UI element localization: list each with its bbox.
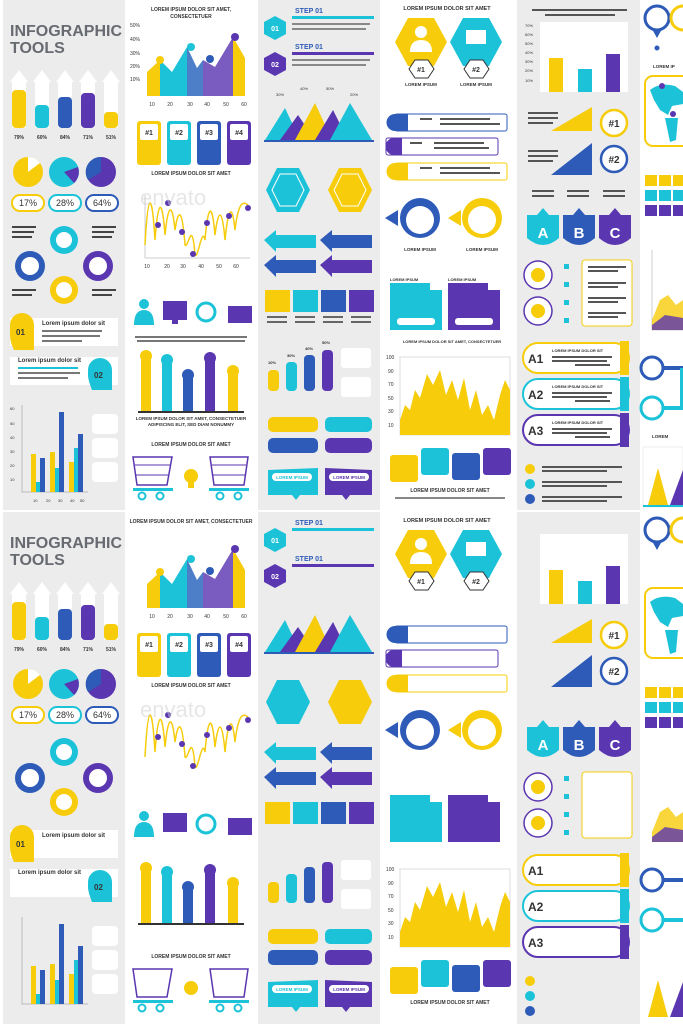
bar chart: 10% [525, 78, 533, 83]
shields A B C: C [610, 225, 621, 242]
yellow area chart: 50 [388, 908, 394, 914]
circular arrows [385, 198, 502, 252]
percentage bars: 50% [322, 340, 330, 345]
mountain chart: 20% [350, 92, 358, 97]
panel: column 2: CONSECTETUER [170, 14, 212, 20]
panel: column 5 [523, 9, 632, 504]
grouped bar chart [22, 917, 118, 1004]
yellow area chart: 90 [388, 369, 394, 375]
A1 A2 A3 pills [523, 341, 629, 447]
A1 A2 A3 pills: A2 [528, 388, 544, 402]
thermometer arrows [10, 582, 120, 653]
hexagon profiles [395, 18, 502, 87]
grouped bar chart: 30 [10, 449, 15, 454]
percentage bars: 30% [287, 353, 295, 358]
area chart: 50 [223, 614, 229, 620]
yellow area chart: 100 [386, 355, 395, 361]
line chart: 40 [198, 264, 204, 270]
callout 01: Lorem ipsum dolor sit [42, 321, 105, 327]
line chart: 20 [164, 264, 170, 270]
callout 02: Lorem ipsum dolor sit [18, 358, 81, 364]
pie charts [12, 157, 118, 211]
mountain chart [264, 615, 374, 654]
panel: column 1 repeat [10, 535, 122, 1004]
list boxes [386, 114, 507, 180]
steps [264, 520, 374, 588]
area chart: 30 [187, 614, 193, 620]
callouts 01/02: Lorem ipsum dolor sit [18, 870, 81, 876]
text and carts [133, 954, 249, 1012]
area chart: 40 [204, 614, 210, 620]
triangle chart [643, 434, 683, 507]
shields A B C: B [574, 225, 585, 242]
buttons: LOREM IPSUM [276, 475, 308, 480]
panel: column 4 repeat [385, 518, 511, 1006]
heading: LOREM IPSUM DOLOR SIT AMET [403, 6, 491, 12]
grid, chart, icons [641, 687, 683, 1017]
callouts 01/02: 01 [16, 840, 25, 849]
yellow area chart [386, 867, 510, 947]
panel: column 2 [130, 7, 252, 500]
bottom icons: LOREM IPSUM DOLOR SIT AMET [410, 1000, 490, 1006]
bottom icons [390, 960, 511, 1006]
area chart [147, 545, 247, 620]
triangle #2 [528, 143, 627, 175]
teardrop diagram [15, 738, 113, 816]
shields: A [538, 737, 549, 754]
bar chart [540, 534, 628, 604]
A pills [523, 853, 629, 959]
callouts 01/02: Lorem ipsum dolor sit [42, 833, 105, 839]
grouped bar chart: 40 [70, 498, 75, 503]
mountain chart: 30% [276, 92, 284, 97]
map: LOREM IP [653, 64, 675, 69]
text blocks: ADIPISCING ELIT, SED DIAM NONUMMY [148, 422, 234, 427]
yellow area chart: 70 [388, 894, 394, 900]
A pills: A3 [528, 936, 544, 950]
step 01: STEP 01 [295, 8, 323, 15]
bar chart: 60% [525, 32, 533, 37]
area chart: 50% [130, 23, 141, 29]
A1 A2 A3 pills: A1 [528, 352, 544, 366]
area chart: 10 [149, 614, 155, 620]
chart title: LOREM IPSUM DOLOR SIT AMET, [151, 7, 232, 13]
area chart: 20 [167, 102, 173, 108]
percentage bars: 10% [268, 360, 276, 365]
panel: column 1: TOOLS [10, 40, 65, 57]
line chart: 30 [180, 264, 186, 270]
icon squares [265, 290, 374, 323]
list boxes [386, 626, 507, 692]
A1 A2 A3 pills: LOREM IPSUM DOLOR SIT [552, 384, 604, 389]
yellow area chart: 30 [388, 921, 394, 927]
area chart: 30 [187, 102, 193, 108]
shields A B C: A [538, 225, 549, 242]
yellow area chart: 100 [386, 867, 395, 873]
text blocks: LOREM IPSUM DOLOR SIT AMET, CONSECTETUER [136, 416, 247, 421]
steps #1-#4 [137, 633, 251, 677]
pie charts: 28% [56, 198, 74, 208]
triangles: #2 [608, 667, 620, 678]
grouped bar chart: 20 [10, 463, 15, 468]
circular arrows [385, 710, 502, 750]
mountain chart: 50% [326, 86, 334, 91]
thermometer arrows [10, 70, 120, 141]
thermometer arrows: 51% [106, 135, 117, 141]
buttons: LOREM IPSUM [333, 987, 365, 992]
icon squares [265, 802, 374, 824]
shields A B C [527, 190, 631, 245]
thermometer arrows: 79% [14, 135, 25, 141]
percentage bars [268, 340, 371, 397]
area chart: 50 [223, 102, 229, 108]
arrows [264, 230, 372, 277]
callout 01 [10, 313, 118, 350]
grouped bar chart: 10 [33, 498, 38, 503]
area chart: 10% [130, 77, 141, 83]
yellow area chart: LOREM IPSUM DOLOR SIT AMET, CONSECTETUER [403, 339, 501, 344]
steps #1-#4: #3 [205, 642, 213, 649]
step 02 [264, 44, 374, 76]
steps: 01 [271, 538, 279, 545]
pie charts: 17% [19, 198, 37, 208]
grouped bar chart: 40 [10, 435, 15, 440]
step 02: 02 [271, 62, 279, 69]
bar chart: 70% [525, 23, 533, 28]
area chart: 60 [241, 614, 247, 620]
callouts 01/02: 02 [94, 883, 103, 892]
map [645, 64, 683, 146]
steps #1-#4: #1 [145, 642, 153, 649]
hexagon profiles: #1 [417, 579, 425, 586]
mountain chart: 40% [300, 86, 308, 91]
grouped bar chart: 60 [10, 406, 15, 411]
icons row [134, 299, 252, 325]
info cards [390, 277, 500, 330]
hand icons with list [524, 260, 632, 326]
pie charts: 28% [56, 710, 74, 720]
yellow area chart: 90 [388, 881, 394, 887]
step 01 [264, 8, 374, 40]
steps: 02 [271, 574, 279, 581]
hexagon profiles [395, 518, 502, 590]
shields [527, 720, 631, 757]
callout 02 [10, 357, 118, 390]
yellow area chart: 50 [388, 396, 394, 402]
line chart: 10 [144, 264, 150, 270]
area chart: 40 [204, 102, 210, 108]
grouped bar chart: 10 [10, 477, 15, 482]
teardrop diagram [12, 226, 116, 304]
panel: column 6 repeat [641, 518, 683, 1017]
hexagon profiles: LOREM IPSUM [460, 82, 492, 87]
thermometer arrows: 79% [14, 647, 25, 653]
shopping carts [133, 457, 249, 500]
icons row [134, 811, 252, 837]
steps #1-#4: #2 [175, 130, 183, 137]
hexagon profiles: #2 [472, 579, 480, 586]
hands list [524, 772, 632, 838]
pins and map [645, 518, 683, 658]
triangles: #1 [608, 631, 620, 642]
thermometer arrows: 71% [83, 647, 94, 653]
bottom icons: LOREM IPSUM DOLOR SIT AMET [410, 488, 490, 494]
steps: STEP 01 [295, 556, 323, 563]
location pins [645, 6, 683, 50]
bar lollipops [138, 350, 244, 413]
hexagons [266, 680, 372, 724]
line chart: 50 [216, 264, 222, 270]
steps #1-#4: #1 [145, 130, 153, 137]
panel: column 4 [385, 6, 511, 499]
yellow area chart: 10 [388, 423, 394, 429]
title: INFOGRAPHIC [10, 23, 122, 40]
title: INFOGRAPHIC [10, 535, 122, 552]
panel: column 5 repeat [523, 534, 632, 1016]
column backgrounds [0, 512, 683, 1024]
A pills: A2 [528, 900, 544, 914]
thermometer arrows: 84% [60, 647, 71, 653]
info cards: LOREM IPSUM [448, 277, 477, 282]
buttons [268, 417, 372, 500]
panel: column 3 repeat [264, 520, 374, 1012]
line chart [144, 195, 251, 270]
text blocks: LOREM IPSUM DOLOR SIT AMET [151, 442, 231, 448]
watermark: envato [140, 185, 206, 210]
buttons [268, 929, 372, 1012]
info cards: LOREM IPSUM [390, 277, 419, 282]
info cards [390, 795, 500, 842]
steps #1-#4: #4 [235, 130, 243, 137]
bar chart: 20% [525, 68, 533, 73]
text and carts: LOREM IPSUM DOLOR SIT AMET [151, 954, 231, 960]
bar chart [525, 9, 628, 92]
panel: column 6 [641, 6, 683, 507]
callout 02: 02 [94, 371, 103, 380]
pie charts [12, 669, 118, 723]
bar chart: 30% [525, 59, 533, 64]
thermometer arrows: 84% [60, 135, 71, 141]
panel: column 1 repeat: TOOLS [10, 552, 65, 569]
A1 A2 A3 pills: LOREM IPSUM DOLOR SIT [552, 420, 604, 425]
bottom half (repeat) [0, 512, 683, 1024]
grouped bar chart: 50 [80, 498, 85, 503]
bullet list [525, 464, 622, 504]
bar chart: 50% [525, 41, 533, 46]
shields: C [610, 737, 621, 754]
watermark: envato [140, 697, 206, 722]
triangle chart: LOREM [652, 434, 669, 439]
panel: column 2 repeat [130, 519, 253, 1012]
yellow area chart [386, 339, 510, 435]
top half [0, 0, 683, 512]
hexagon profiles: #2 [472, 67, 480, 74]
bar lollipops [138, 862, 244, 925]
grouped bar chart: 50 [10, 421, 15, 426]
yellow area chart: 70 [388, 382, 394, 388]
steps #1-#4 [137, 121, 251, 165]
bullets [525, 976, 535, 1016]
steps #1-#4: #2 [175, 642, 183, 649]
hexagon profiles: LOREM IPSUM DOLOR SIT AMET [403, 518, 491, 524]
pie charts: 64% [93, 710, 111, 720]
shields: B [574, 737, 585, 754]
grouped bar chart [10, 405, 118, 503]
arrows [264, 742, 372, 789]
hexagon profiles: #1 [417, 67, 425, 74]
triangle #1 [528, 107, 627, 136]
line chart: LOREM IPSUM DOLOR SIT AMET [151, 683, 231, 689]
area chart: 20% [130, 64, 141, 70]
area chart: 40% [130, 37, 141, 43]
triangle #2: #2 [608, 155, 620, 166]
bottom icons [390, 448, 511, 499]
hexagon profiles: LOREM IPSUM [405, 82, 437, 87]
A1 A2 A3 pills: LOREM IPSUM DOLOR SIT [552, 348, 604, 353]
steps #1-#4: #3 [205, 130, 213, 137]
area chart: 30% [130, 51, 141, 57]
steps: STEP 01 [295, 520, 323, 527]
connector icons [641, 357, 683, 419]
buttons: LOREM IPSUM [333, 475, 365, 480]
text blocks [135, 336, 247, 448]
panel: column 1 [10, 23, 122, 503]
percentage bars: 40% [305, 346, 313, 351]
colored grid [645, 175, 683, 216]
pie charts: 64% [93, 198, 111, 208]
area chart: 60 [241, 102, 247, 108]
mountain chart [264, 86, 374, 142]
step 01: 01 [271, 26, 279, 33]
grouped bar chart: 30 [58, 498, 63, 503]
area chart: 10 [149, 102, 155, 108]
line chart title: LOREM IPSUM DOLOR SIT AMET [151, 171, 231, 177]
thermometer arrows: 60% [37, 647, 48, 653]
chart title: LOREM IPSUM DOLOR SIT AMET, CONSECTETUER [130, 519, 253, 525]
small area chart [652, 250, 683, 330]
area chart [130, 23, 247, 108]
circular arrows: LOREM IPSUM [404, 247, 436, 252]
hexagons [266, 168, 372, 212]
A pills: A1 [528, 864, 544, 878]
bar chart: 40% [525, 50, 533, 55]
callout 01: 01 [16, 328, 25, 337]
column backgrounds [0, 0, 683, 512]
A1 A2 A3 pills: A3 [528, 424, 544, 438]
area chart: 20 [167, 614, 173, 620]
pie charts: 17% [19, 710, 37, 720]
buttons: LOREM IPSUM [276, 987, 308, 992]
thermometer arrows: 51% [106, 647, 117, 653]
percentage bars [268, 860, 371, 909]
yellow area chart: 10 [388, 935, 394, 941]
panel: column 3 [264, 8, 374, 500]
thermometer arrows: 60% [37, 135, 48, 141]
callouts 01/02 [10, 825, 118, 902]
line chart: 60 [233, 264, 239, 270]
thermometer arrows: 71% [83, 135, 94, 141]
line chart [145, 683, 251, 769]
grouped bar chart: 20 [46, 498, 51, 503]
step 02: STEP 01 [295, 44, 323, 51]
yellow area chart: 30 [388, 409, 394, 415]
triangle #1: #1 [608, 119, 620, 130]
triangles [551, 619, 627, 687]
steps #1-#4: #4 [235, 642, 243, 649]
circular arrows: LOREM IPSUM [466, 247, 498, 252]
